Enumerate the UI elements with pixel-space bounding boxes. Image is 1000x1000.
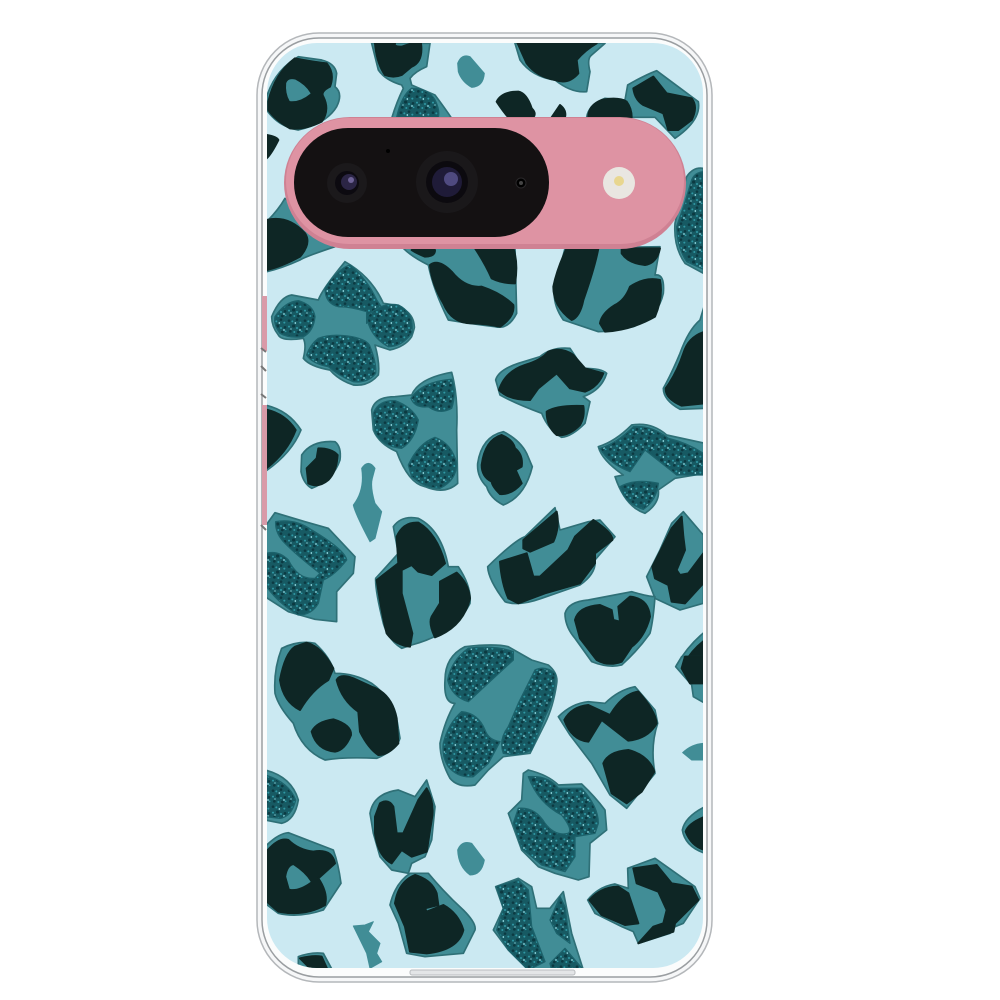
spot: large glitter left (272, 262, 414, 385)
spot: teal oval top (458, 56, 484, 87)
spot: glitter far left (265, 513, 355, 622)
spot: dark above camera (497, 92, 535, 117)
lens: center (416, 151, 478, 213)
middle spots (265, 303, 705, 666)
spot: ring bottom left (265, 833, 341, 915)
spot: right of center bottom (558, 687, 658, 808)
spot: teal sliver (353, 463, 382, 542)
spot: glitter center bottom (440, 645, 557, 786)
spot: right edge lower (682, 807, 705, 853)
spot: left glitter (265, 770, 298, 823)
flash (603, 167, 635, 199)
spot: bottom left edge (298, 953, 332, 970)
spot: top center right (515, 43, 605, 92)
spot: right edge glitter (675, 168, 705, 273)
spot: bottom sliver (353, 922, 382, 968)
bottom port notch (410, 970, 575, 975)
spot: bottom center dark (390, 873, 475, 957)
spot: small teal oval (458, 842, 484, 875)
phone case outer shell (257, 33, 712, 982)
spot: sliver right (683, 743, 703, 760)
spot: right edge upper (676, 657, 705, 703)
spot: rounded center right (565, 592, 655, 666)
spot: upper right dark (496, 348, 607, 437)
camera window (294, 128, 549, 237)
sensor dots (386, 149, 526, 188)
spot: left dark (265, 405, 301, 472)
spot: left edge small (267, 135, 278, 158)
spot: right edge cut (677, 632, 705, 665)
upper spots (267, 43, 705, 385)
spot: glitter right (598, 424, 705, 513)
side buttons (261, 296, 267, 530)
spot: right bottom dark (588, 858, 700, 943)
spot: right dark (647, 512, 703, 610)
spot: right top dark (663, 303, 705, 409)
lens: left (327, 163, 367, 203)
spot: glitter bottom (493, 878, 583, 970)
lower spots (265, 642, 705, 970)
spot: under camera right (553, 247, 664, 332)
leopard print back (265, 43, 705, 970)
spot: center oval (478, 432, 532, 505)
spot: top left ring (267, 57, 340, 130)
camera bar (284, 117, 686, 249)
spot: small round (301, 441, 340, 488)
spot: left below camera (267, 198, 335, 272)
spot: center right wide (488, 508, 615, 604)
spot: dark U (370, 780, 435, 873)
spot: top center with glitter (372, 43, 452, 118)
spot: under camera center (403, 247, 517, 327)
spot: top right (587, 71, 699, 138)
spot: small triangle above camera (552, 105, 565, 117)
spot: glitter bottom middle (508, 770, 607, 880)
spot: large dark center (376, 518, 470, 648)
spot: large bottom left (275, 642, 400, 760)
spot: glitter center (372, 372, 458, 490)
